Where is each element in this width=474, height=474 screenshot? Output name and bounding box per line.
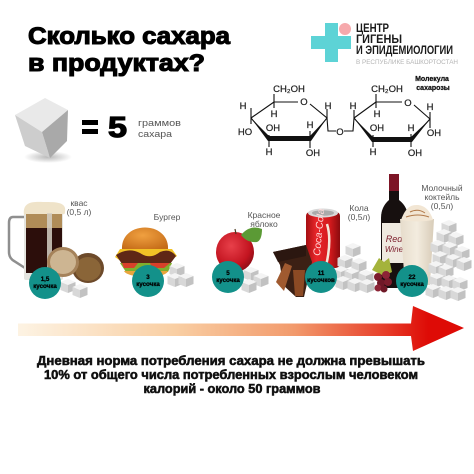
label: red apple: Красное	[248, 210, 281, 220]
label: kvass	[67, 198, 92, 217]
label: milkshake: (0,5л)	[431, 201, 453, 211]
label: cola: Кола	[349, 203, 369, 213]
badge: 22 cubes	[396, 265, 428, 297]
title: в продуктах?	[28, 50, 205, 77]
sucrose molecule	[238, 84, 441, 159]
sugar cubes	[168, 263, 194, 287]
sucrose molecule: H	[374, 109, 381, 120]
badge: 22 cubes: кусочка	[400, 281, 424, 288]
title	[28, 23, 231, 77]
caption: sucrose molecule	[415, 76, 450, 92]
sucrose molecule: O	[300, 97, 308, 108]
badge: 1.5 cubes: кусочка	[33, 283, 57, 290]
sucrose molecule: H	[427, 102, 434, 113]
badge: 3 cubes	[132, 265, 164, 297]
badge: 1.5 cubes	[29, 267, 61, 299]
badge: 11 cubes: кусочков	[307, 277, 335, 284]
label: milkshake: коктейль	[424, 192, 460, 202]
chocolate	[273, 245, 312, 297]
bread	[47, 247, 104, 283]
badge: 5 cubes: кусочка	[216, 277, 240, 284]
equation: one cube equals 5 grams of sugar: 5	[108, 112, 127, 144]
sugar cube pile	[426, 220, 472, 301]
mug	[9, 202, 65, 280]
equation: one cube equals 5 grams of sugar: граммов	[138, 118, 181, 128]
label: milkshake: Молочный	[421, 183, 463, 193]
label: cola: (0,5л)	[348, 212, 370, 222]
sucrose molecule: CH₂OH	[371, 84, 403, 95]
badge: 11 cubes: 11	[318, 270, 325, 277]
sugar cubes	[60, 279, 88, 298]
text: daily sugar norm: калорий - около 50 граммов	[144, 382, 321, 396]
logo: centre of hygiene and epidemiology: ЦЕНТР	[356, 23, 389, 35]
sucrose molecule: OH	[370, 123, 384, 134]
sucrose molecule: OH	[306, 148, 320, 159]
sucrose molecule: H	[307, 120, 314, 131]
text: daily sugar norm: 10% от общего числа потребленных взрослым человеком	[44, 368, 418, 382]
caption: sucrose molecule: сахарозы	[416, 85, 450, 92]
equation: one cube equals 5 grams of sugar	[82, 112, 181, 144]
badge: 3 cubes: 3	[146, 274, 150, 281]
label: red apple: яблоко	[250, 219, 278, 229]
badge: 3 cubes: кусочка	[136, 281, 160, 288]
badge: 5 cubes: 5	[226, 270, 230, 277]
sucrose molecule: O	[404, 98, 412, 109]
badge: 22 cubes: 22	[409, 274, 416, 281]
label: kvass: квас	[70, 198, 88, 208]
label: red apple	[248, 210, 281, 229]
title: Сколько сахара	[28, 23, 231, 50]
arrow: increasing sugar	[18, 306, 464, 351]
sucrose molecule: OH	[427, 128, 441, 139]
label: cola	[348, 203, 370, 222]
apple illustration	[216, 227, 262, 272]
item: wine, grapes and milkshake	[372, 174, 472, 301]
badge: 5 cubes	[212, 261, 244, 293]
sucrose molecule: H	[408, 123, 415, 134]
sucrose molecule: CH₂OH	[273, 84, 305, 95]
sucrose molecule: H	[266, 147, 273, 158]
badge: 1.5 cubes: 1,5	[41, 276, 50, 283]
item: kvass and bread	[9, 198, 104, 299]
wine bottle: Wine	[385, 245, 404, 254]
item: red apple	[212, 210, 281, 293]
burger illustration	[115, 228, 177, 277]
label: milkshake	[421, 183, 463, 211]
sucrose molecule: H	[350, 101, 357, 112]
sucrose molecule: HO	[238, 127, 252, 138]
sucrose molecule: H	[325, 101, 332, 112]
equation: one cube equals 5 grams of sugar: сахара	[138, 129, 172, 139]
caption: sucrose molecule: Молекула	[415, 76, 449, 83]
sucrose molecule: OH	[266, 123, 280, 134]
wine bottle	[381, 174, 408, 288]
sucrose molecule: H	[240, 101, 247, 112]
cola can: Coca-Cola	[312, 208, 327, 256]
sugar cube pile	[334, 243, 374, 293]
text: daily sugar norm	[37, 354, 425, 396]
logo: centre of hygiene and epidemiology: ГИГЕНЫ	[356, 34, 402, 46]
icon: sugar cube	[15, 98, 72, 163]
milkshake	[400, 205, 434, 285]
grapes	[372, 258, 392, 292]
label: kvass: (0,5 л)	[67, 207, 92, 217]
logo: centre of hygiene and epidemiology: В РЕСПУБЛИКЕ БАШКОРТОСТАН	[356, 59, 458, 66]
label: burger: Бургер	[154, 212, 181, 222]
sucrose molecule: O	[336, 127, 344, 138]
sucrose molecule: H	[370, 147, 377, 158]
badge: 11 cubes	[305, 261, 337, 293]
logo: centre of hygiene and epidemiology: И ЭПИДЕМИОЛОГИИ	[356, 45, 453, 57]
sucrose molecule: H	[271, 109, 278, 120]
logo: centre of hygiene and epidemiology	[311, 23, 458, 66]
item: burger	[115, 212, 194, 297]
item: cola and chocolate	[273, 203, 374, 297]
sucrose molecule: OH	[408, 148, 422, 159]
text: daily sugar norm: Дневная норма потребления сахара не должна превышать	[37, 354, 425, 368]
sugar cubes	[242, 267, 268, 293]
wine bottle: Red	[386, 234, 403, 244]
